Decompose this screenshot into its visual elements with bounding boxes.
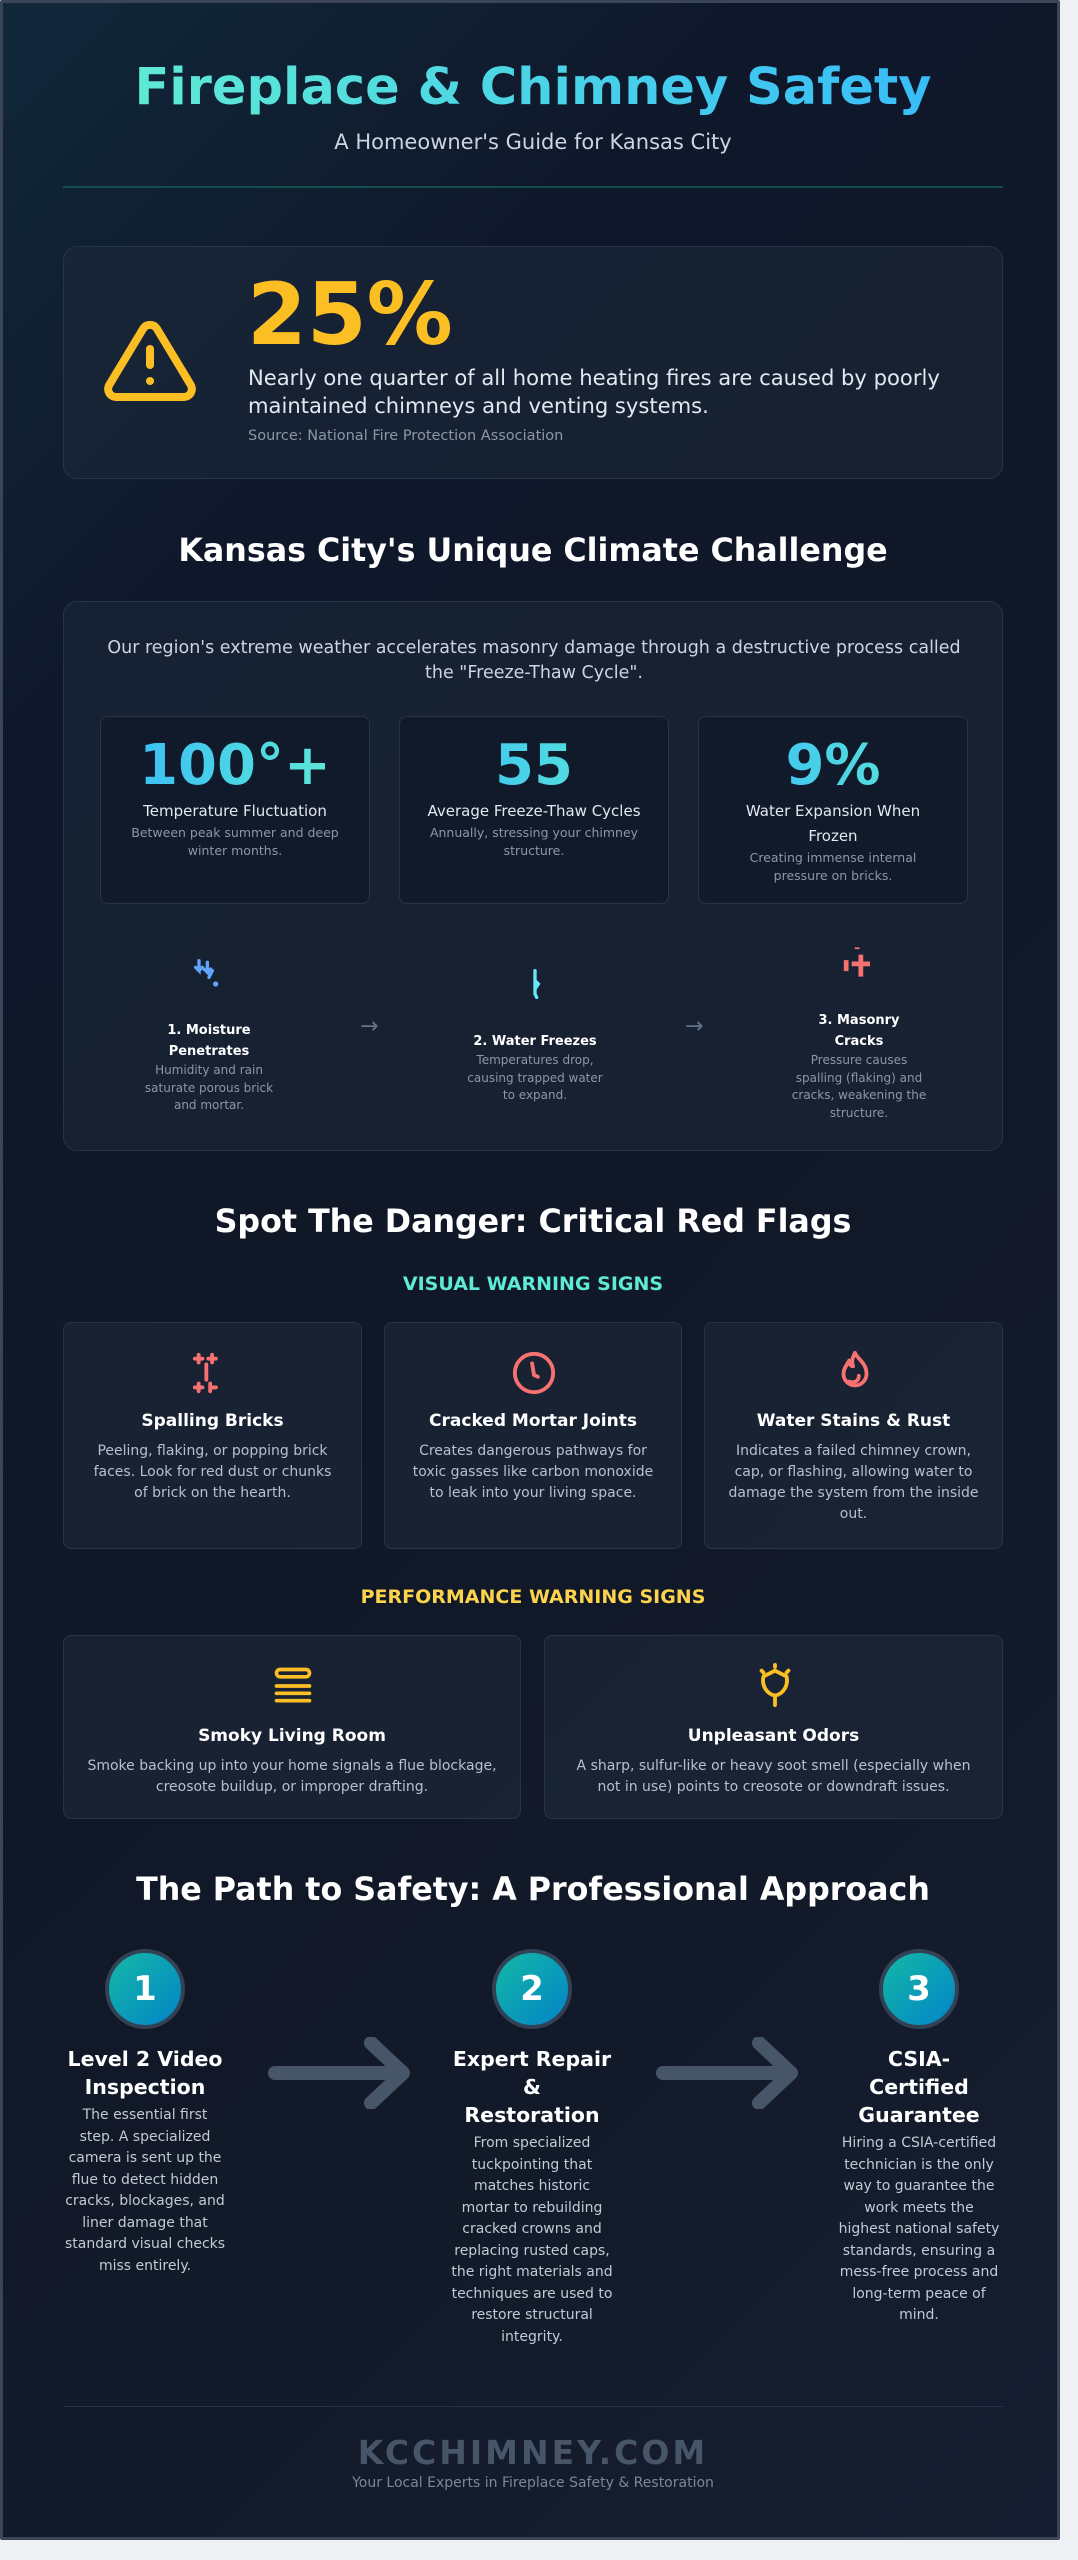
icon: odor — [760, 1663, 790, 1708]
step 2: 2. Water Freezes — [473, 1034, 597, 1049]
icon: stack — [274, 1668, 312, 1702]
card: mortar: Creates dangerous pathways for toxic gasses like carbon monoxide to leak into your living space. — [413, 1443, 653, 1501]
stat box: 100: Between peak summer and deep winter months. — [131, 825, 339, 858]
card: spalling — [63, 1322, 362, 1549]
panel: stat 25% — [63, 246, 1003, 479]
step circle 2: 2 — [520, 1969, 544, 2009]
stat box: 55 — [399, 716, 669, 904]
card: spalling: Spalling Bricks — [141, 1411, 284, 1431]
step 1 text: liner damage that — [82, 2214, 208, 2230]
step 1: 1. Moisture Penetrates — [167, 1023, 251, 1059]
step 2 text: restore structural — [471, 2307, 593, 2323]
step 3 text — [839, 2047, 999, 2323]
card: smoky: Smoky Living Room — [198, 1726, 386, 1746]
step 3 text: mess-free process and — [840, 2264, 998, 2280]
step 2 text: cracked crowns and — [462, 2221, 602, 2237]
step 3 text: Certified — [869, 2075, 969, 2099]
stat box: 9%: Creating immense internal pressure on bricks. — [750, 850, 916, 883]
card: water stains — [704, 1322, 1003, 1549]
arrow: → — [685, 1014, 703, 1039]
step 3 text: Guarantee — [858, 2103, 980, 2127]
step 2 text: techniques are used to — [452, 2286, 612, 2302]
step 1 text: camera is sent up the — [69, 2150, 221, 2166]
heading: red flags: Spot The Danger: Critical Red Flags — [215, 1204, 851, 1240]
footer tagline: Your Local Experts in Fireplace Safety & Restoration — [352, 2475, 714, 2491]
card: spalling: Peeling, flaking, or popping brick faces. Look for red dust or chunks of brick on the hearth. — [94, 1443, 331, 1501]
step 3 text: work meets the — [864, 2200, 974, 2216]
heading: climate: Kansas City's Unique Climate Challenge — [178, 533, 888, 569]
title: Fireplace & Chimney Safety — [134, 58, 932, 117]
step 3 text: standards, ensuring a — [843, 2242, 995, 2258]
stat box: 100 — [100, 716, 370, 904]
footer brand: KCCHIMNEY.COM — [358, 2433, 708, 2472]
intro text: Our region's extreme weather accelerates masonry damage through a destructive process called the "Freeze-Thaw Cycle". — [107, 638, 961, 683]
stat number: 25% — [247, 265, 453, 365]
card: smoky: Smoke backing up into your home signals a flue blockage, creosote buildup, or improper drafting. — [87, 1758, 497, 1795]
step 3 text: Hiring a CSIA-certified — [842, 2135, 996, 2151]
stat box: 9%: 9% — [785, 733, 881, 798]
stat box: 100: 100°+ — [139, 733, 331, 798]
card: mortar — [384, 1322, 682, 1549]
step 1: Humidity and rain saturate porous brick and mortar. — [145, 1063, 273, 1112]
step 1 text: flue to detect hidden — [72, 2172, 218, 2188]
step 2 text: tuckpointing that — [472, 2156, 592, 2172]
step 1 — [145, 959, 273, 1112]
card: water stains: Water Stains & Rust — [757, 1411, 950, 1431]
step 2 text: matches historic — [474, 2178, 590, 2194]
step 3: 3. Masonry — [818, 1013, 900, 1028]
stat text: Nearly one quarter of all home heating fires are caused by poorly maintained chimneys and venting systems. — [248, 365, 940, 418]
card: odors: A sharp, sulfur-like or heavy soot smell (especially when not in use) points to creosote or downdraft issues. — [577, 1758, 970, 1795]
step 1 text: cracks, blockages, and — [65, 2193, 225, 2209]
subheading: visual: VISUAL WARNING SIGNS — [403, 1273, 663, 1295]
arrow 1 — [268, 2037, 410, 2109]
stat box: 100: Temperature Fluctuation — [143, 802, 327, 820]
step 3 — [792, 947, 926, 1120]
arrow: → — [360, 1014, 378, 1039]
step 2: Temperatures drop, causing trapped water to expand. — [467, 1053, 603, 1102]
step 3 text: CSIA- — [888, 2047, 950, 2071]
icon: rain — [194, 959, 218, 987]
icon: flame — [842, 1350, 868, 1388]
icon: cracks — [844, 947, 870, 977]
card: odors: Unpleasant Odors — [688, 1726, 859, 1746]
step circle 1 — [105, 1949, 185, 2029]
icon: clock — [512, 1352, 556, 1394]
step 2 text: & — [523, 2075, 541, 2099]
heading: path to safety: The Path to Safety: A Professional Approach — [136, 1872, 930, 1908]
source: Source: National Fire Protection Association — [248, 428, 563, 444]
card: odors — [544, 1635, 1003, 1819]
step 1 text: step. A specialized — [80, 2128, 210, 2144]
stat box: 55: Annually, stressing your chimney structure. — [430, 825, 638, 858]
step 3 text: highest national safety — [839, 2221, 999, 2237]
step circle 3: 3 — [907, 1969, 931, 2009]
stat box: 55: 55 — [495, 733, 573, 798]
card: water stains: Indicates a failed chimney crown, cap, or flashing, allowing water to damage the system from the inside out. — [728, 1443, 979, 1522]
step circle 2 — [492, 1949, 572, 2029]
step 3 text: technician is the only — [844, 2156, 994, 2172]
step circle 1: 1 — [133, 1969, 157, 2009]
stat box: 9% — [698, 716, 968, 904]
step 3 text: way to guarantee the — [844, 2178, 994, 2194]
stat box: 9%: Water Expansion When Frozen — [746, 802, 920, 845]
subtitle: A Homeowner's Guide for Kansas City — [334, 130, 732, 154]
step 3: Cracks — [835, 1034, 883, 1049]
step 2 text: Restoration — [464, 2103, 600, 2127]
step 2 text: replacing rusted caps, — [454, 2242, 610, 2258]
step 2 text: integrity. — [501, 2328, 563, 2344]
step 1 text — [65, 2047, 225, 2274]
step 2 text — [451, 2047, 613, 2344]
card: mortar: Cracked Mortar Joints — [429, 1411, 637, 1431]
stat box: 55: Average Freeze-Thaw Cycles — [427, 802, 641, 820]
step 3: Pressure causes spalling (flaking) and cracks, weakening the structure. — [792, 1053, 926, 1120]
icon: sparkle cracks — [192, 1352, 218, 1394]
step 2 text: the right materials and — [451, 2264, 613, 2280]
step 2 text: From specialized — [474, 2135, 590, 2151]
step 3 text: long-term peace of — [852, 2286, 986, 2302]
step 2 — [467, 969, 603, 1102]
step 1 text: miss entirely. — [99, 2258, 191, 2274]
step 1 text: Inspection — [85, 2075, 205, 2099]
card: smoky — [63, 1635, 521, 1819]
subheading: performance: PERFORMANCE WARNING SIGNS — [361, 1586, 705, 1608]
panel: climate — [63, 601, 1003, 1151]
step circle 3 — [879, 1949, 959, 2029]
step 1 text: standard visual checks — [65, 2236, 225, 2252]
arrow 2 — [656, 2037, 798, 2109]
step 2 text: mortar to rebuilding — [462, 2200, 602, 2216]
icon: freeze — [533, 969, 540, 1000]
step 1 text: Level 2 Video — [68, 2047, 222, 2071]
icon: warning triangle — [104, 320, 196, 401]
step 2 text: Expert Repair — [453, 2047, 611, 2071]
step 3 text: mind. — [899, 2307, 939, 2323]
step 1 text: The essential first — [83, 2107, 207, 2123]
